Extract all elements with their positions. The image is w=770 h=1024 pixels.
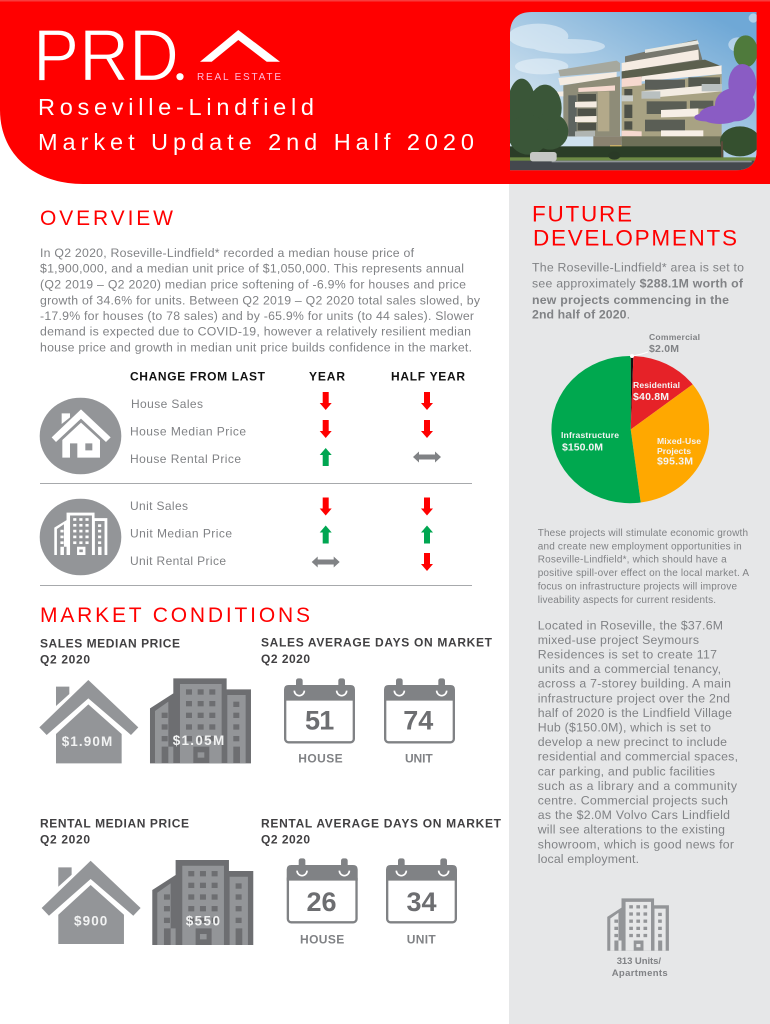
pie chart: projects by type: $40.8M [633,391,669,403]
future developments small paragraph: focus on infrastructure projects will improve [538,582,737,592]
future developments main paragraph: as the $2.0M Volvo Cars Lindfield [538,808,730,822]
future developments intro: 2nd half of 2020. [532,307,630,321]
house rows: House Sales [131,397,203,411]
heading: future developments: FUTURE [532,202,632,227]
logo: PRD wordmark: REAL ESTATE [197,72,281,83]
overview paragraph: growth of 34.6% for units. Between Q2 2019 – Q2 2020 total sales slowed, by [40,293,481,307]
future developments main paragraph: local employment. [538,852,639,866]
future developments intro [532,261,744,321]
building photo [507,12,760,170]
future developments main paragraph [537,618,738,866]
logo: PRD wordmark: PRD [33,16,179,96]
rental median price: $900 [74,914,107,929]
pie chart: projects by type: Projects [657,446,691,456]
future developments main paragraph: car parking, and public facilities [538,764,715,778]
table header [130,370,465,384]
table header: YEAR [309,370,345,384]
heading: market conditions: MARKET CONDITIONS [40,604,310,627]
sales median price: $1.05M [173,733,224,748]
rental average days on market: HOUSE [300,932,344,946]
rental average days on market: UNIT [407,932,436,946]
heading: future developments: DEVELOPMENTS [533,226,737,251]
future developments main paragraph: Residences is set to create 117 [538,648,717,662]
future developments main paragraph: Hub ($150.0M), which is set to [538,720,711,734]
table header: HALF YEAR [391,370,465,384]
future developments main paragraph: across a 7-storey building. A main [538,677,731,691]
future developments main paragraph: units and a commercial tenancy, [538,662,721,676]
rental median price: RENTAL MEDIAN PRICE [40,816,189,830]
rental median price: Q2 2020 [40,832,90,846]
future developments intro: The Roseville-Lindfield* area is set to [532,261,744,275]
future developments main paragraph: showroom, which is good news for [538,837,734,851]
change table [40,370,472,586]
sales average days on market: 74 [403,705,433,735]
house rows: House Rental Price [130,452,241,466]
rental average days on market [261,816,502,946]
table header: CHANGE FROM LAST [130,370,266,384]
sales median price: SALES MEDIAN PRICE [40,636,180,650]
house rows [130,392,441,466]
overview paragraph [40,246,481,354]
future developments main paragraph: infrastructure project over the 2nd [538,691,730,705]
future developments intro: see approximately $288.1M worth of [532,276,744,290]
future developments small paragraph: liveability aspects for current residents. [538,595,716,606]
future developments small paragraph: positive spill-over effect on the local market. A [538,568,749,579]
overview paragraph: $1,900,000, and a median unit price of $1,050,000. This represents annual [40,262,464,276]
pie chart: projects by type: $95.3M [657,456,693,468]
overview paragraph: In Q2 2020, Roseville-Lindfield* recorded a median house price of [40,246,415,260]
overview paragraph: -17.9% for houses (to 78 sales) and by -65.9% for units (to 44 sales). Slower [40,309,474,323]
pie chart: projects by type: $150.0M [562,442,603,454]
future developments small paragraph [538,528,749,606]
overview paragraph: house price and growth in median unit price builds confidence in the market. [40,340,472,354]
house rows: House Median Price [130,425,246,439]
heading: future developments [532,202,737,251]
sales average days on market: HOUSE [298,752,343,766]
report title [38,94,474,155]
report title: Roseville-Lindfield [38,94,314,120]
sales median price [39,636,251,763]
rental average days on market: 26 [306,887,336,917]
logo: PRD wordmark [33,16,281,96]
sales median price: $1.90M [62,734,112,749]
overview paragraph: demand is expected due to COVID-19, however a relatively resilient median [40,325,471,339]
header banner [0,0,770,184]
unit rows: Unit Median Price [130,527,232,541]
unit rows: Unit Sales [130,499,188,513]
sales average days on market: SALES AVERAGE DAYS ON MARKET [261,636,493,650]
pie chart: projects by type: Infrastructure [561,430,619,440]
rental average days on market: RENTAL AVERAGE DAYS ON MARKET [261,816,502,830]
pie chart: projects by type: Commercial [649,332,700,342]
future developments main paragraph: centre. Commercial projects such [538,794,728,808]
pie chart: projects by type: Mixed-Use [657,436,701,446]
future developments small paragraph: These projects will stimulate economic growth [538,528,748,539]
sales average days on market: Q2 2020 [261,652,310,666]
future developments main paragraph: Located in Roseville, the $37.6M [538,618,723,632]
future developments main paragraph: half of 2020 is the Lindfield Village [538,706,732,720]
pie chart: projects by type [551,332,709,503]
sales average days on market [261,636,493,766]
unit rows [130,498,433,571]
future developments main paragraph: residential and commercial spaces, [538,750,738,764]
rental median price: $550 [186,914,220,929]
sidebar background [509,184,770,1024]
rental median price [40,816,253,945]
unit rows: Unit Rental Price [130,554,226,568]
sales median price: Q2 2020 [40,652,90,666]
pie chart: projects by type: Residential [633,380,680,390]
future developments small paragraph: Roseville-Lindfield*, which should have a [538,554,727,566]
report title: Market Update 2nd Half 2020 [38,129,474,155]
pie chart: projects by type: $2.0M [649,343,679,355]
sales average days on market: UNIT [405,752,433,766]
icon: apartments count: Apartments [612,968,668,979]
future developments main paragraph: develop a new precinct to include [538,735,727,749]
future developments main paragraph: will see alterations to the existing [537,823,725,837]
icon: house circle [40,398,121,474]
icon: apartments count [607,898,669,979]
icon: unit circle [40,499,121,575]
future developments intro: new projects commencing in the [532,293,729,307]
rental average days on market: Q2 2020 [261,832,310,846]
future developments main paragraph: such as a library and a community [538,779,738,793]
icon: apartments count: 313 Units/ [617,956,661,967]
heading: overview: OVERVIEW [40,207,173,230]
future developments main paragraph: mixed-use project Seymours [538,633,699,647]
future developments small paragraph: and create new employment opportunities in [538,542,742,552]
overview paragraph: (Q2 2019 – Q2 2020) median price softening of -6.9% for houses and price [40,277,466,291]
sales average days on market: 51 [305,705,334,735]
rental average days on market: 34 [406,887,436,917]
